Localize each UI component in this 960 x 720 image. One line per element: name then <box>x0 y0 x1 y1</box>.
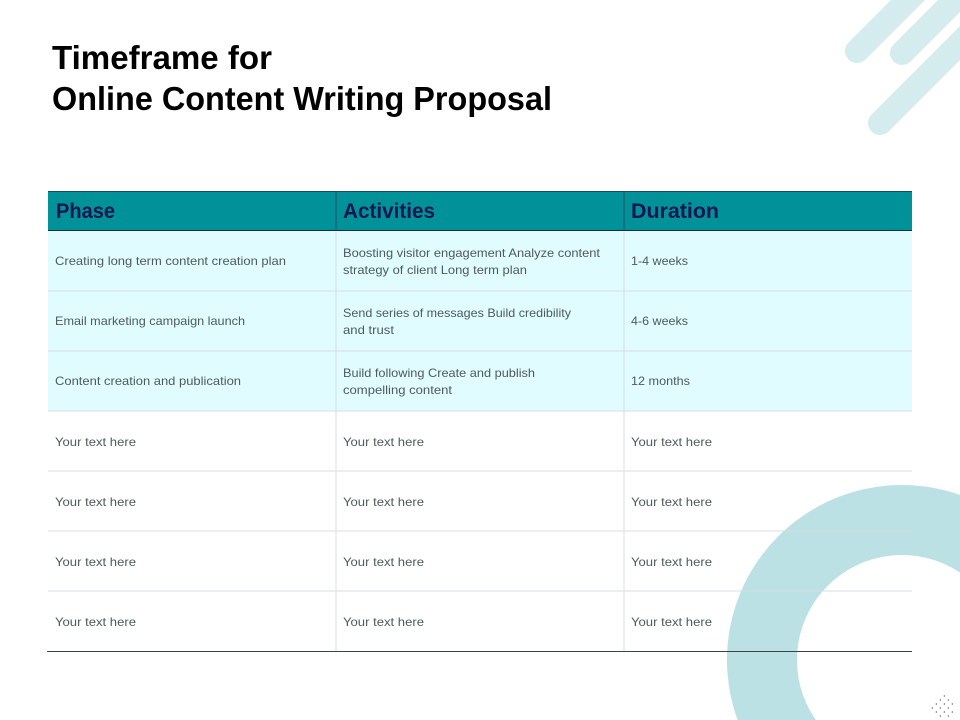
highlighted row backgrounds <box>48 231 912 411</box>
row 7: Your text here <box>343 615 424 629</box>
row 7: Your text here <box>55 615 136 629</box>
row 7 <box>55 615 712 629</box>
decorative diagonal stripes <box>845 0 960 135</box>
row 5 <box>55 495 712 509</box>
row 1: Creating long term content creation plan <box>55 254 286 268</box>
row 6 <box>55 555 712 569</box>
row 5: Your text here <box>631 495 712 509</box>
row 3: 12 months <box>631 374 690 388</box>
table header: Activities <box>343 200 435 223</box>
row 2: 4-6 weeks <box>631 314 688 328</box>
title: Online Content Writing Proposal <box>52 80 552 117</box>
row 2: Send series of messages Build credibility <box>343 306 571 320</box>
row 7: Your text here <box>631 615 712 629</box>
table header: Duration <box>631 200 719 223</box>
row 6: Your text here <box>343 555 424 569</box>
row 3: Build following Create and publish <box>343 366 535 380</box>
decorative ring <box>727 485 960 720</box>
dot pattern <box>932 695 953 717</box>
row 1: 1-4 weeks <box>631 254 688 268</box>
row 4: Your text here <box>55 435 136 449</box>
row 3 <box>55 366 690 397</box>
row 2: Email marketing campaign launch <box>55 314 245 328</box>
row 5: Your text here <box>55 495 136 509</box>
row 3: compelling content <box>343 383 453 397</box>
table header <box>48 191 912 231</box>
row 6: Your text here <box>55 555 136 569</box>
row 3: Content creation and publication <box>55 374 241 388</box>
row 5: Your text here <box>343 495 424 509</box>
title <box>52 39 552 117</box>
row 2: and trust <box>343 323 395 337</box>
table header: Phase <box>56 200 115 223</box>
row 4: Your text here <box>631 435 712 449</box>
row 1 <box>55 246 688 277</box>
row 2 <box>55 306 688 337</box>
timeframe table <box>47 191 912 652</box>
title: Timeframe for <box>52 39 272 76</box>
row 6: Your text here <box>631 555 712 569</box>
row 4 <box>55 435 712 449</box>
row 4: Your text here <box>343 435 424 449</box>
row 1: Boosting visitor engagement Analyze content <box>343 246 601 260</box>
table grid lines <box>48 231 912 651</box>
row 1: strategy of client Long term plan <box>343 263 527 277</box>
